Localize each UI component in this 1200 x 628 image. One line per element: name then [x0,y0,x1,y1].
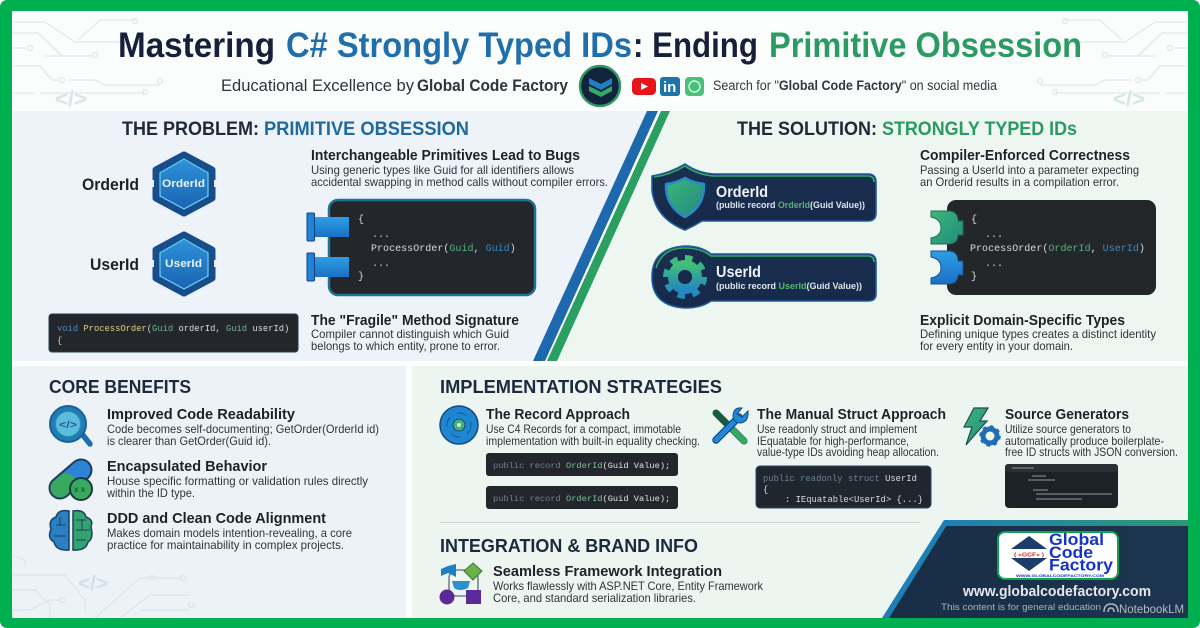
strategy: source generators: automatically produce boilerplate- [1005,434,1164,448]
panel: implementation and integration [412,366,1188,618]
title: Mastering [118,26,275,65]
text: compiler-enforced correctness: Compiler-Enforced Correctness [920,148,1130,164]
icon: lightning and gear [964,408,1000,446]
icon: OrderId hexagon: OrderId [162,178,205,190]
logo: Global Code Factory: Factory [1049,556,1114,574]
strategy: record approach: implementation with built-in equality checking. [486,434,700,448]
subtitle: Educational Excellence by [221,76,414,95]
heading: the solution: THE SOLUTION: [737,118,877,140]
heading: the problem: PRIMITIVE OBSESSION [264,118,469,140]
strategy: record approach [486,406,700,448]
icon: capsule [60,470,92,500]
disclaimer: This content is for general education [941,602,1101,613]
strategy: manual struct: The Manual Struct Approach [757,406,946,423]
panel: core benefits: </> [78,573,108,595]
code snippet: readonly struct: public readonly struct UserId [763,474,917,484]
text: fragile method signature: Compiler cannot distinguish which Guid [311,327,509,341]
code panel: typed call: ... [985,259,1003,270]
benefit: encapsulated behavior: within the ID type. [106,486,195,500]
icon: YouTube [632,78,656,95]
icon: capsule: x x [74,485,86,494]
strategy: record approach: Use C4 Records for a compact, immotable [486,422,681,436]
icon: OrderId hexagon [151,155,217,213]
logo: Global Code Factory: Global [1049,531,1104,549]
panel: core benefits [12,366,406,618]
text: explicit domain-specific types: for every entity in your domain. [920,339,1073,353]
panel: brand [882,520,1188,618]
benefit: ddd and clean code: practice for maintainability in complex projects. [107,538,344,552]
strategy: manual struct [757,406,946,459]
benefit: encapsulated behavior [106,458,368,500]
benefit: ddd and clean code: DDD and Clean Code Alignment [107,510,326,527]
code panel: fragile call [329,200,535,295]
title: Primitive Obsession [769,26,1082,65]
heading: core benefits: CORE BENEFITS [49,376,191,397]
strategy: manual struct: IEquatable for high-performance, [757,434,909,448]
badge: OrderId record [652,164,876,230]
code snippet: record two [486,486,678,509]
text: fragile method signature: The "Fragile" Method Signature [311,313,519,329]
benefit: encapsulated behavior: Encapsulated Behavior [107,458,267,475]
heading: the problem [122,118,469,140]
badge: UserId record [652,246,876,308]
icon: magnifier: </> [59,420,77,431]
text: fragile method signature [311,313,519,353]
code panel: typed call: ... [985,230,1003,241]
icon: LinkedIn [660,77,680,96]
header panel: </> [1113,88,1145,111]
icon: brain [50,511,92,550]
icon: primitive connectors [307,213,349,281]
divider [440,522,920,523]
code panel: fragile call: ... [372,230,390,241]
badge: OrderId record: (public record OrderId(Guid Value)) [716,200,865,210]
heading: integration and brand info: INTEGRATION & BRAND INFO [440,535,698,556]
code snippet: readonly struct: { [763,485,768,495]
logo: Global Code Factory [998,531,1118,579]
text: seamless framework integration [493,563,764,605]
code thumbnail: generated source [1005,464,1118,508]
text: explicit domain-specific types: Explicit Domain-Specific Types [920,313,1125,329]
icon: disc [440,406,478,444]
icon: shield [666,178,704,217]
strategy: manual struct: value-type IDs avoiding heap allocation. [757,445,939,459]
code snippet: method signature: void ProcessOrder(Guid orderId, Guid userId) [57,324,289,334]
title: C# Strongly Typed IDs [286,26,632,65]
label: OrderId: OrderId [82,175,139,194]
heading: the solution [737,118,1077,140]
benefit: improved code readability [107,406,379,448]
text: explicit domain-specific types [920,313,1156,353]
badge: UserId record: (public record UserId(Guid Value)) [716,281,862,291]
icon: UserId hexagon: UserId [165,258,202,270]
text: seamless framework integration: Seamless Framework Integration [493,563,722,580]
text: explicit domain-specific types: Defining unique types creates a distinct identity [920,327,1156,341]
logo: Global Code Factory: WWW.GLOBALCODEFACTORY.COM [1016,573,1105,578]
icon: gear [666,258,704,296]
badge: UserId record: UserId [716,264,761,281]
benefit: ddd and clean code: Makes domain models intention-revealing, a core [107,526,352,540]
benefit: encapsulated behavior: House specific formatting or validation rules directly [107,474,368,488]
icon: typed connectors [931,211,963,284]
logo: Global Code Factory: ( «GCF» ) [1014,552,1044,558]
text: interchangeable primitives: Interchangeable Primitives Lead to Bugs [311,148,580,164]
website url: www.globalcodefactory.com [962,583,1151,600]
text: compiler-enforced correctness: an Orderid results in a compilation error. [920,175,1119,189]
text: fragile method signature: belongs to which entity, prone to error. [311,339,500,353]
strategy: source generators: Utilize source generators to [1005,422,1131,436]
code panel: typed call: ProcessOrder(OrderId, UserId) [970,243,1145,255]
title: : Ending [633,26,758,65]
text: interchangeable primitives: accidental swapping in method calls without compiler errors. [311,175,608,189]
icon: LinkedIn: in [663,79,676,96]
strategy: source generators: Source Generators [1005,406,1129,423]
icon: WhatsApp [685,77,704,96]
heading: the solution: STRONGLY TYPED IDs [882,118,1077,140]
icon: magnifier [50,406,90,444]
icon: wrench and screwdriver [716,408,748,441]
benefit: improved code readability: is clearer than GetOrder(Guid id). [107,434,271,448]
diagonal divider [533,111,670,361]
code panel: typed call [947,200,1156,295]
header panel: </> [55,88,87,111]
strategy: source generators [1005,406,1178,459]
text: interchangeable primitives: Using generic types like Guid for all identifiers allows [311,163,574,177]
watermark: NotebookLM: NotebookLM [1119,602,1184,616]
text: seamless framework integration: Core, and standard serialization libraries. [493,591,696,605]
code panel: typed call: { [971,214,977,226]
code snippet: readonly struct: : IEquatable<UserId> {...} [785,495,923,505]
code panel: fragile call: ProcessOrder(Guid, Guid) [371,243,516,255]
text: compiler-enforced correctness [920,148,1139,189]
code panel: fragile call: { [358,214,364,226]
badge: OrderId record: OrderId [716,184,768,201]
strategy: record approach: The Record Approach [486,406,630,423]
benefit: ddd and clean code [107,510,352,552]
subtitle: Global Code Factory [417,76,568,95]
benefit: improved code readability: Code becomes self-documenting; GetOrder(OrderId id) [107,422,379,436]
code snippet: readonly struct [756,466,931,508]
heading: the problem: THE PROBLEM: [122,118,259,140]
code snippet: record two: public record OrderId(Guid Value); [493,494,670,504]
strategy: source generators: free ID structs with JSON conversion. [1005,445,1178,459]
code panel: fragile call: } [358,271,364,283]
code snippet: method signature: { [57,336,62,346]
code snippet: record one: public record OrderId(Guid Value); [493,461,670,471]
social search text: Search for "Global Code Factory" on social media [713,78,997,93]
text: seamless framework integration: Works flawlessly with ASP.NET Core, Entity Framework [493,579,764,593]
benefit: improved code readability: Improved Code Readability [107,406,296,423]
label: UserId: UserId [90,255,139,274]
heading: implementation strategies: IMPLEMENTATION STRATEGIES [440,376,722,397]
icon: framework integration [440,563,482,604]
title [118,26,1082,65]
logo: Global Code Factory: Code [1049,544,1093,562]
code panel: typed call: } [971,271,977,283]
icon: channel logo [580,66,620,106]
code panel: fragile call: ... [372,259,390,270]
subtitle [221,76,568,95]
strategy: manual struct: Use readonly struct and implement [757,422,918,436]
header panel [12,11,1188,111]
panel: solution background [546,111,1188,361]
icon: UserId hexagon [151,235,217,293]
text: interchangeable primitives [311,148,608,189]
code snippet: record one [486,453,678,476]
text: compiler-enforced correctness: Passing a UserId into a parameter expecting [920,163,1139,177]
code snippet: method signature [49,314,298,352]
panel: problem background [12,111,652,361]
